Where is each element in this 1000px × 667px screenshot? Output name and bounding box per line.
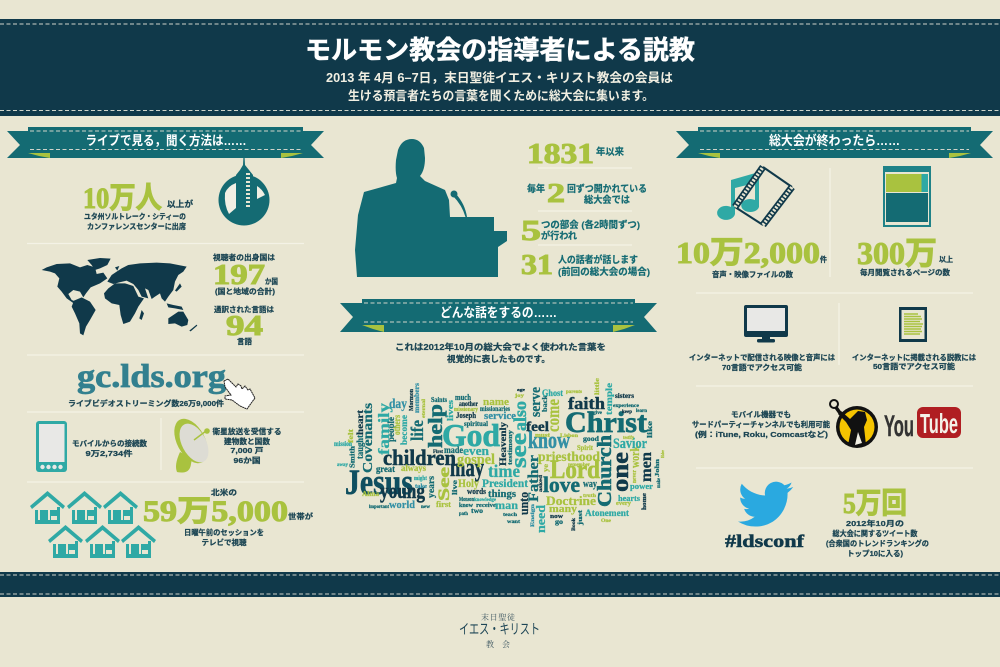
word cloud: years [426,475,436,498]
stat: satellite: 建物数と国数 [224,436,271,446]
stat: twice a year: 総大会では [584,194,630,206]
subtitle [326,70,673,103]
word cloud: experience [613,404,640,409]
stat: 595,000 households [143,487,314,547]
hashtag: #ldsconf [725,531,805,551]
word cloud: way [583,479,597,490]
word cloud: little [595,378,601,395]
word cloud: back [541,395,549,412]
word cloud: President [482,476,528,490]
stat: five sessions [521,216,640,247]
logo: church name [459,612,540,649]
ribbon: how to watch: ライブで見る，聞く方法は…… [86,133,246,148]
word cloud: become [399,415,409,445]
word cloud: testimony [508,430,514,465]
stat: 595,000 households: テレビで視聴 [202,537,247,547]
stat: since 1831: 年以来 [596,146,624,158]
word cloud: serve [528,387,544,417]
word cloud: every [616,501,631,507]
icon: twitter bird [738,482,793,527]
word cloud: know [528,428,570,454]
stat: 31 speakers: 31 [521,250,553,281]
stat: 102,000 files: 音声・映像ファイルの数 [712,269,793,279]
word cloud: young [380,478,425,503]
world map [42,258,197,335]
icon: speaker at podium [355,139,507,277]
stat: 50,000 tweets: 2012年10月の [846,518,904,528]
word cloud: never [632,470,638,483]
word cloud: men [638,452,655,482]
word cloud caption: これは2012年10月の総大会でよく使われた言葉を [395,342,606,352]
word cloud: One [601,519,612,524]
word cloud: gospel [457,452,495,468]
word cloud: name [483,396,509,408]
word cloud: many [549,503,578,515]
word cloud: life [407,420,427,441]
word cloud: important [369,505,389,510]
word cloud: family [376,403,393,455]
word cloud: like [646,421,654,438]
word cloud: know [459,503,474,509]
word cloud: now [550,514,564,520]
stat: talk languages: インターネットに掲載される説教には [852,352,976,362]
word cloud: service [484,411,517,422]
word cloud: First [433,450,443,455]
footer band [0,572,1000,597]
word cloud: heart [355,410,365,435]
word cloud: Smith [348,446,356,468]
word cloud: Father [526,455,542,502]
word cloud: need [533,504,548,533]
word cloud: Saints [431,396,447,404]
word cloud: might [414,476,427,482]
word cloud: Mormon [409,388,415,411]
stat: 595,000 households: 世帯が [288,511,314,521]
stat: 595,000 households: 日曜午前のセッションを [184,527,264,537]
ribbon: what they talk about [340,299,657,332]
url: gc.lds.org [68,359,227,408]
word cloud: feel [526,420,549,435]
word cloud: eternal [422,398,427,418]
stat: satellite: 衛星放送を受信する [212,426,282,436]
stat: 595,000 households: 59万5,000 [143,495,288,528]
word cloud: knowledge [474,498,497,503]
word cloud: receive [476,503,496,509]
logo: church name: 教 会 [486,639,510,649]
word cloud: Atonement [585,508,629,518]
stat: 197 countries, 94 languages: 視聴者の出身国は [213,252,276,262]
stat: 197 countries, 94 languages: 94 [226,311,263,342]
logo: YouTube [884,407,961,443]
stat: streaming languages [689,352,835,372]
icon: browser page [883,166,931,227]
word cloud: Christ [565,406,647,439]
stat: 50,000 tweets: トップ10に入る) [847,549,903,558]
word cloud: Heavenly [498,421,508,466]
stat: twice a year: 毎年 [527,183,545,195]
word cloud: hearts [618,494,640,503]
icon: conference center tower [218,156,270,226]
word cloud: love [543,472,580,497]
stat: 50,000 tweets: 総大会に関するツイート数 [832,528,918,538]
word cloud: help [425,404,447,448]
icon: document [899,307,927,342]
text: third party channels: (例：iTune, Roku, Comcastなど) [695,429,829,439]
stat: satellite: 7,000 戸 [230,446,264,455]
word cloud: Alma [362,490,380,498]
word cloud: spiritual [464,420,488,428]
word cloud: come [543,399,563,432]
word cloud: Holy [458,476,479,490]
word cloud: new [421,505,430,510]
word cloud: truth [583,494,596,499]
word cloud: See [436,467,453,501]
word cloud caption [395,342,606,364]
word cloud: John [655,458,661,477]
ribbon: how to watch [7,127,324,158]
word cloud: path [459,512,468,517]
word cloud: Church [594,435,616,507]
word cloud: Covenants [361,402,376,473]
word cloud: felt [347,428,355,443]
word cloud: joy [514,394,525,399]
word cloud: may [450,453,484,482]
stat: 3 million pages: 以上 [939,254,953,264]
word cloud: Spirit [577,444,594,452]
word cloud: Lord [550,455,600,484]
word cloud: asked [539,475,544,492]
word cloud: Ghost [542,388,563,398]
word cloud: world [389,499,415,511]
word cloud: mission [334,440,352,448]
word cloud: Joseph [456,411,476,420]
word cloud: even [463,443,490,458]
stat: 197 countries, 94 languages: か国 [265,277,278,286]
word cloud: Savior [613,436,647,452]
word cloud: great [376,464,395,474]
stat: talk languages [852,352,976,371]
word cloud: give [593,411,603,416]
text: third party channels [692,409,830,439]
stat: 100,000 attendees [83,182,193,231]
word cloud: learn [636,409,647,414]
icon: mormon channel logo [830,400,878,448]
word cloud: home [642,493,648,510]
word cloud: lives [446,400,455,421]
word cloud: live [451,480,459,495]
word cloud: unto [516,492,531,515]
stat: five sessions: が行われ [541,230,577,242]
word cloud: must [535,433,550,439]
word cloud: others [392,415,402,435]
word cloud: much [455,393,471,402]
word cloud: Monson [459,497,474,503]
subtitle: 生ける預言者たちの言葉を聞くために総大会に集います。 [348,88,654,103]
stat: talk languages: 50言語でアクセス可能 [873,361,956,371]
logo: YouTube: Tube [920,408,958,439]
stat: 197 countries, 94 languages: 言語 [237,337,252,346]
word cloud: missionary [454,407,478,413]
word cloud: temple [604,383,614,415]
logo: church name: 末日聖徒 [481,612,515,622]
word cloud: day [389,397,407,412]
stat: streaming languages: 70言語でアクセス可能 [722,362,803,372]
word cloud: want [507,520,520,525]
stat: twice a year [527,178,647,208]
text: third party channels: モバイル機器でも [731,409,791,419]
word cloud: remember [568,463,591,468]
stat: five sessions: つの部会 (各2時間ずつ) [541,219,640,231]
stat: mobile connections [72,438,147,458]
word cloud: go [555,518,564,526]
word cloud: Ensign [531,504,536,527]
stat: since 1831 [527,139,624,170]
icon: phone [36,421,67,472]
stat: 197 countries, 94 languages: 197 [213,260,265,291]
ribbon: after conference: 総大会が終わったら…… [769,133,900,148]
word cloud: always [401,463,426,473]
word cloud caption: 視覚的に表したものです。 [447,354,550,364]
word cloud: Book [572,518,577,531]
stat: 31 speakers: (前回の総大会の場合) [558,266,650,278]
word cloud: sisters [615,392,634,400]
stat: five sessions: 5 [521,216,541,247]
stat: twice a year: 2 [547,178,565,208]
word cloud: away [337,463,348,468]
stat: 31 speakers: 人の話者が話します [558,254,638,266]
stat: 197 countries, 94 languages [213,252,278,346]
icon: pointer hand [224,379,255,409]
word cloud: make [657,477,662,488]
word cloud: ye [542,464,550,472]
url: gc.lds.org: gc.lds.org [77,359,227,395]
word cloud: two [471,507,484,515]
word cloud: made [444,445,463,455]
word cloud: God [442,417,500,453]
word cloud: time [488,461,520,481]
stat: 197 countries, 94 languages: (国と地域の合計) [215,286,276,296]
stat: 50,000 tweets [826,488,929,558]
stat: 50,000 tweets: (合衆国のトレンドランキングの [826,538,929,548]
word cloud: power [630,482,653,491]
word cloud: words [467,487,486,496]
url: gc.lds.org: ライブビデオストリーミング数26万9,000件 [68,398,225,408]
stat: since 1831: 1831 [527,139,594,170]
stat: 100,000 attendees: カンファレンスセンターに出席 [87,221,186,231]
logo: church name: イエス・キリスト [459,621,540,637]
stat: 100,000 attendees: 10万人 [83,182,162,215]
stat: 102,000 files: 件 [820,254,827,264]
stat: mobile connections: 9万2,734件 [86,448,133,458]
word cloud: Jesus [345,462,413,502]
word cloud: priesthood [538,450,600,465]
word cloud: teach [503,513,517,518]
stat: 595,000 households: 北米の [211,487,237,497]
word cloud: people [386,417,396,442]
word cloud: missionaries [480,405,510,413]
word cloud: also [510,401,530,431]
word cloud: children [383,445,456,470]
stat: 100,000 attendees: 以上が [167,199,193,209]
word cloud: good [583,435,599,443]
title: モルモン教会の指導者による説教 [305,35,695,65]
icon: houses [30,491,156,558]
ribbon: what they talk about: どんな話をするの…… [440,305,557,320]
word cloud: work [627,445,642,468]
word cloud: age [517,387,525,392]
stat: 102,000 files: 10万2,000 [676,235,820,270]
stat: satellite: 96か国 [234,456,260,465]
stat: 197 countries, 94 languages: 通訳された言語は [214,304,274,314]
word cloud: testify [623,436,634,441]
word cloud: keep [622,410,632,415]
stat: 50,000 tweets: 5万回 [843,488,907,520]
ribbon: after conference [676,127,993,158]
word cloud [334,378,665,533]
stat: mobile connections: モバイルからの接続数 [72,438,147,448]
word cloud: one [608,452,634,492]
word cloud: taught [355,435,365,459]
word cloud: another [459,400,478,408]
stat: 102,000 files [676,235,827,279]
stat: twice a year: 回ずつ開かれている [567,183,647,195]
icon: music note and film [717,167,792,225]
word cloud: see [506,433,531,468]
word cloud: take [415,484,427,490]
stat: 100,000 attendees: ユタ州ソルトレーク・シティーの [84,211,186,221]
subtitle: 2013 年 4月 6–7日，末日聖徒イエス・キリスト教会の会員は [326,70,673,85]
stat: 3 million pages: 毎月閲覧されるページの数 [860,267,950,277]
word cloud: Elder [660,450,665,458]
word cloud: parents [566,390,582,395]
word cloud: just [578,510,584,527]
word cloud: man [495,498,518,512]
word cloud: members [413,383,421,413]
stat: 3 million pages: 300万 [857,235,937,271]
word cloud: things [488,488,517,500]
icon: monitor [744,305,788,342]
stat: streaming languages: インターネットで配信される映像と音声には [689,352,835,362]
word cloud: Lisbon [560,434,578,439]
word cloud: first [436,500,451,509]
icon: satellite dish [167,413,215,472]
word cloud: faith [568,394,606,413]
text: third party channels: サードパーティーチャンネルでも利用可能 [692,419,830,429]
word cloud: Doctrine [546,493,596,508]
header band [0,19,1000,116]
stat: satellite [212,426,282,465]
stat: 31 speakers [521,250,650,281]
logo: YouTube: You [884,410,914,443]
